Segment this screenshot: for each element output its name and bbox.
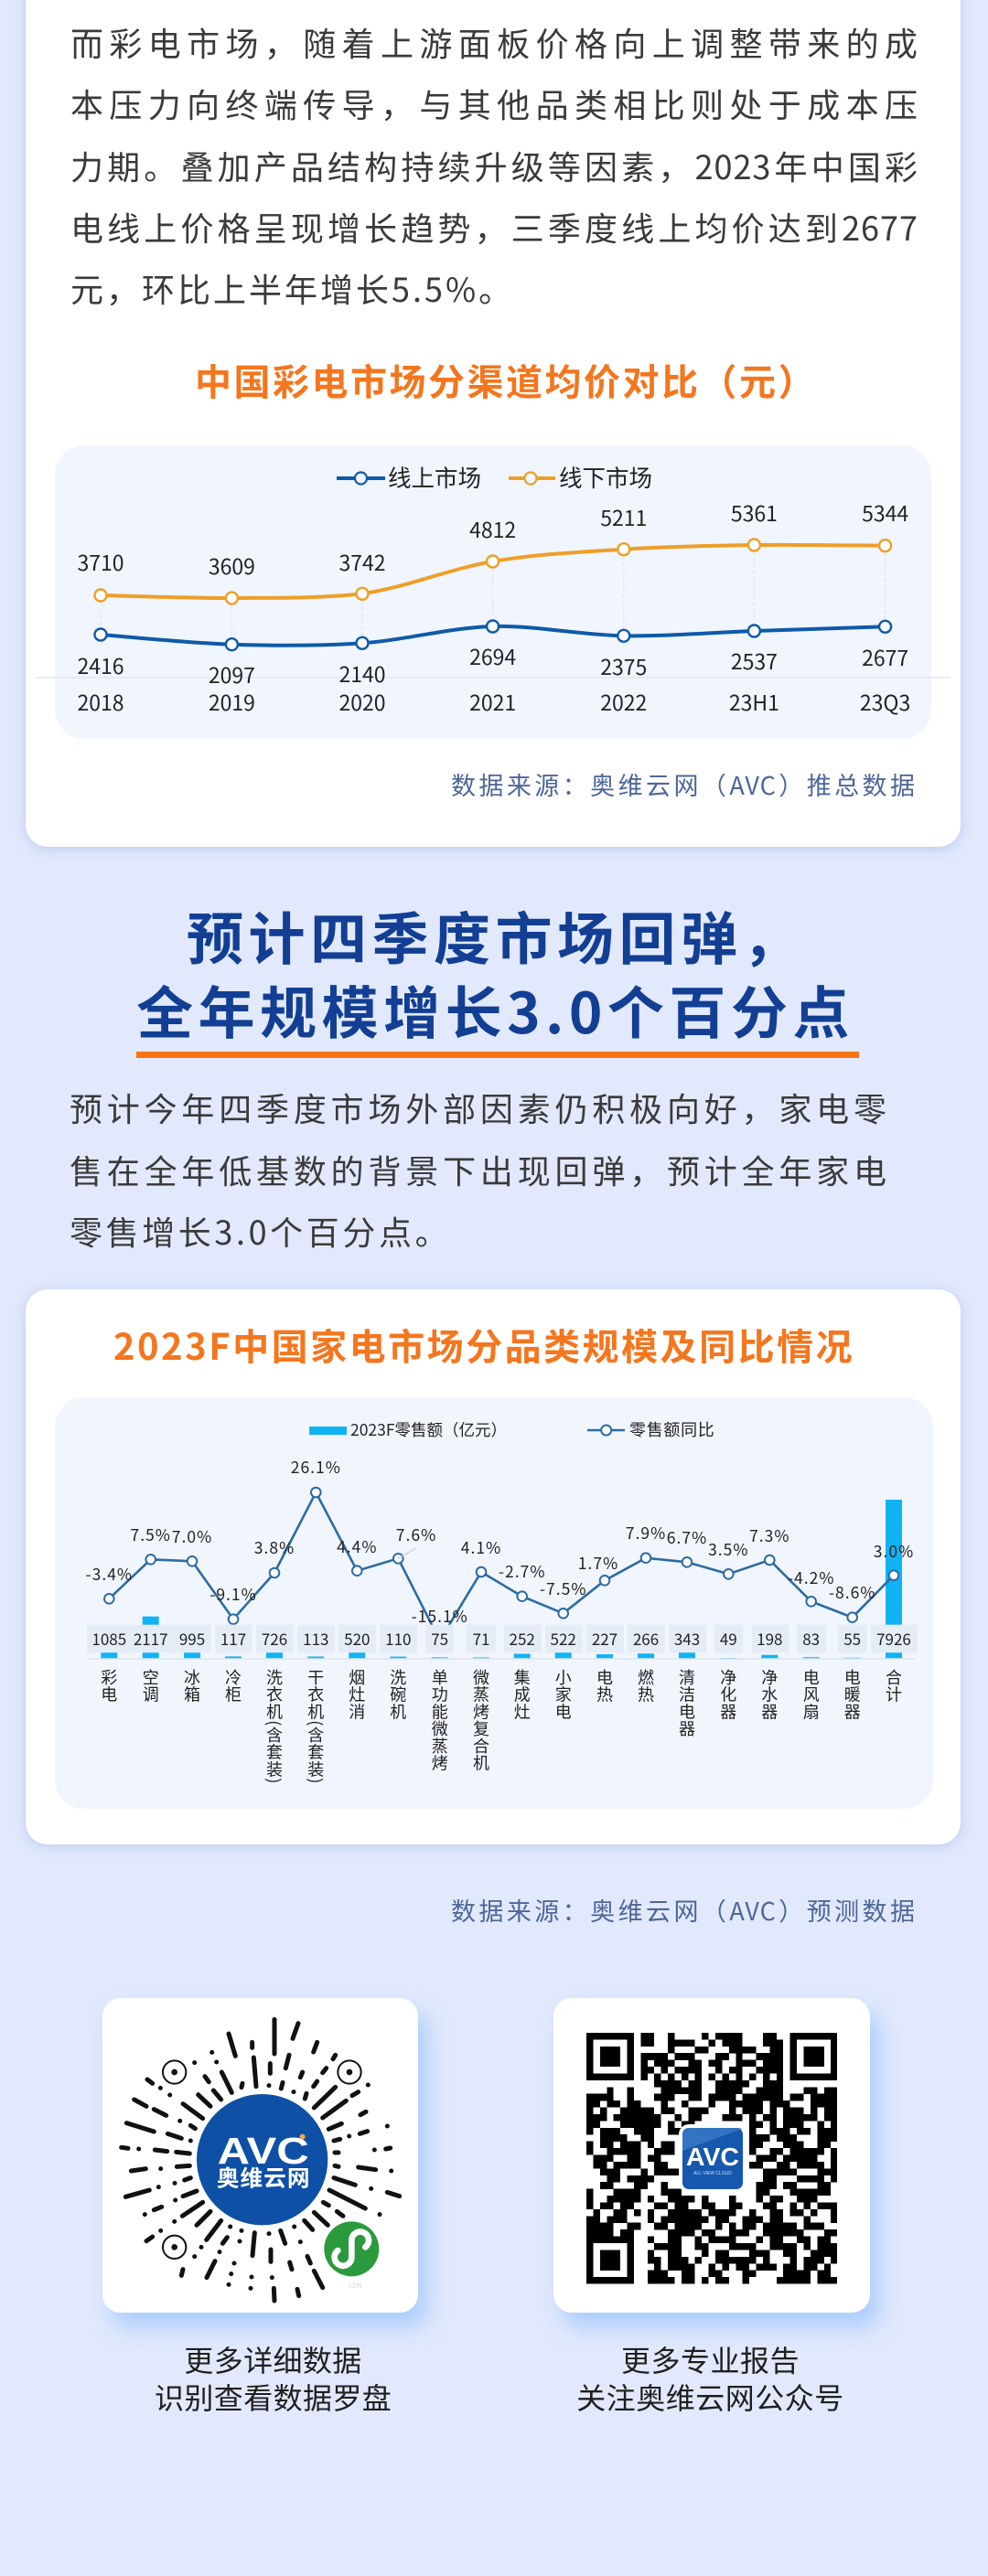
panel: category forecast card <box>26 1289 961 1844</box>
data labels and year axis: 2375 <box>600 650 647 681</box>
growth percentage labels: 6.7% <box>667 1526 707 1549</box>
category labels: 冷柜 <box>221 1669 245 1703</box>
retail value numbers: 71 <box>473 1627 489 1650</box>
text block: Q4 forecast paragraph: 预计今年四季度市场外部因素仍积极向好，家电零 <box>70 1084 887 1131</box>
icon: AVC circular logo <box>197 2094 328 2225</box>
category labels: 干衣机(含套装) <box>304 1669 328 1784</box>
retail value numbers: 522 <box>551 1627 576 1650</box>
category labels: 空调 <box>139 1669 163 1704</box>
icon: sunburst code pattern <box>122 2019 400 2301</box>
category labels: 清洁电器 <box>675 1669 699 1737</box>
growth percentage labels: -2.7% <box>499 1560 545 1583</box>
growth percentage labels: 26.1% <box>291 1456 341 1479</box>
data labels and year axis: 4812 <box>469 513 516 544</box>
icon: AVC square logo: AVC <box>686 2143 739 2171</box>
section heading: Q4 rebound: 预计四季度市场回弹， <box>187 893 804 976</box>
icon: mini program badge: LDN <box>349 2281 361 2291</box>
section heading: Q4 rebound <box>136 893 859 1058</box>
icon: AVC circular logo: 奥维云网 <box>217 2161 309 2194</box>
heading: channel average price chart: 中国彩电市场分渠道均价对比（元） <box>195 353 817 406</box>
growth percentage labels: 3.5% <box>708 1538 749 1561</box>
growth percentage labels <box>86 1456 914 1628</box>
category labels: 净化器 <box>716 1669 740 1720</box>
data labels and year axis: 2020 <box>338 686 386 717</box>
chart legend: 2023F零售额（亿元） <box>350 1418 507 1441</box>
data labels and year axis: 5344 <box>862 497 908 528</box>
icon: AVC square logo: ALL VIEW CLOUD <box>693 2171 732 2176</box>
category labels: 洗碗机 <box>386 1669 410 1720</box>
retail value label boxes <box>87 1625 918 1652</box>
caption: official account: 关注奥维云网公众号 <box>576 2376 844 2418</box>
retail value numbers: 117 <box>220 1627 246 1650</box>
category labels: 彩电 <box>97 1669 121 1703</box>
data labels and year axis: 2021 <box>469 686 516 717</box>
data labels and year axis: 23Q3 <box>860 686 910 717</box>
growth percentage labels: -4.2% <box>788 1566 834 1589</box>
retail value bars <box>101 1500 902 1659</box>
data labels and year axis: 2416 <box>77 649 124 680</box>
retail value numbers: 110 <box>385 1627 411 1650</box>
heading: category forecast chart: 2023F中国家电市场分品类规模及同比情况 <box>113 1318 854 1371</box>
data labels and year axis: 2677 <box>862 641 908 672</box>
growth percentage labels: 7.6% <box>396 1523 436 1546</box>
retail value numbers: 2117 <box>134 1627 168 1650</box>
category labels: 燃热 <box>634 1669 658 1703</box>
growth percentage labels: 1.7% <box>578 1552 618 1575</box>
text block: Q4 forecast paragraph: 零售增长3.0个百分点。 <box>70 1207 451 1255</box>
category labels: 电风扇 <box>800 1669 823 1720</box>
retail value numbers: 252 <box>510 1627 535 1650</box>
category labels: 小家电 <box>552 1669 575 1720</box>
text block: Q4 forecast paragraph: 售在全年低基数的背景下出现回弹，预计全年家电 <box>70 1146 887 1193</box>
panel: top white card <box>26 0 961 847</box>
data labels and year axis: 2694 <box>469 640 516 671</box>
growth percentage labels: -3.4% <box>86 1563 133 1586</box>
category labels: 单功能微蒸烤 <box>428 1669 452 1772</box>
text block: colour TV market paragraph: 元，环比上半年增长5.5%。 <box>70 264 514 312</box>
data labels and year axis: 3609 <box>209 550 255 581</box>
text block: Q4 forecast paragraph <box>70 1084 887 1255</box>
growth percentage labels: -9.1% <box>209 1583 257 1606</box>
retail value numbers: 995 <box>179 1627 205 1650</box>
icon: mini program badge <box>324 2221 379 2291</box>
retail value numbers: 198 <box>757 1627 782 1650</box>
icon: QR code modules <box>586 2036 837 2281</box>
growth percentage labels: -7.5% <box>540 1577 586 1600</box>
text block: colour TV market paragraph: 电线上价格呈现增长趋势，三季度线上均价达到2677 <box>70 203 918 251</box>
chart legend: 零售额同比 <box>629 1417 715 1441</box>
retail value numbers: 113 <box>303 1627 328 1650</box>
category labels: 电热 <box>593 1669 617 1703</box>
retail value numbers <box>91 1627 911 1650</box>
growth percentage labels: 7.3% <box>749 1524 790 1547</box>
growth percentage labels: 3.8% <box>254 1536 295 1559</box>
data labels and year axis: 5361 <box>731 497 778 528</box>
category labels: 电暖器 <box>841 1669 864 1720</box>
year-on-year growth line <box>104 1488 898 1641</box>
category labels: 集成灶 <box>510 1669 534 1720</box>
retail value numbers: 266 <box>633 1627 659 1650</box>
orange line: offline market <box>95 540 891 604</box>
panel: official account QR card <box>553 1998 870 2313</box>
caption: mini program: 识别查看数据罗盘 <box>155 2376 392 2418</box>
category labels <box>97 1669 906 1784</box>
growth percentage labels: 4.1% <box>461 1536 501 1559</box>
growth percentage labels: -8.6% <box>829 1581 875 1604</box>
text block: colour TV market paragraph: 而彩电市场，随着上游面板价格向上调整带来的成 <box>70 18 918 66</box>
data labels and year axis: 2097 <box>209 658 255 689</box>
growth percentage labels: -15.1% <box>412 1605 468 1628</box>
section heading: Q4 rebound: 全年规模增长3.0个百分点 <box>136 967 854 1050</box>
data labels and year axis <box>77 497 910 717</box>
category labels: 合计 <box>882 1669 906 1703</box>
data labels and year axis: 23H1 <box>729 686 779 717</box>
category labels: 冰箱 <box>180 1669 204 1703</box>
retail value numbers: 55 <box>843 1627 861 1650</box>
retail value numbers: 7926 <box>876 1627 911 1650</box>
data labels and year axis: 2019 <box>209 686 255 717</box>
category labels: 洗衣机(含套装) <box>263 1669 286 1784</box>
blue line: online market <box>95 620 891 650</box>
text block: colour TV market paragraph <box>70 18 918 312</box>
retail value numbers: 1085 <box>91 1627 126 1650</box>
retail value numbers: 227 <box>592 1627 618 1650</box>
source note: forecast data: 数据来源：奥维云网（AVC）预测数据 <box>451 1892 916 1928</box>
chart legend: 线上市场 <box>388 460 481 494</box>
growth percentage labels: 3.0% <box>874 1540 914 1563</box>
caption: mini program <box>155 2338 392 2418</box>
text block: colour TV market paragraph: 力期。叠加产品结构持续升级等因素，2023年中国彩 <box>70 142 918 189</box>
caption: official account <box>576 2338 844 2418</box>
retail value numbers: 49 <box>720 1627 737 1650</box>
chart legend: 线下市场 <box>559 460 652 494</box>
panel: channel average price line chart <box>55 445 931 739</box>
caption: official account: 更多专业报告 <box>621 2338 800 2380</box>
retail value numbers: 343 <box>674 1627 700 1650</box>
growth percentage labels: 7.0% <box>172 1525 212 1548</box>
chart legend <box>337 460 652 494</box>
panel: category retail and growth chart <box>55 1397 933 1809</box>
source note: online estimates: 数据来源：奥维云网（AVC）推总数据 <box>451 766 916 802</box>
growth percentage labels: 4.4% <box>337 1535 378 1558</box>
icon: AVC circular logo: AVC <box>218 2130 309 2172</box>
retail value numbers: 75 <box>431 1627 448 1650</box>
retail value numbers: 520 <box>344 1627 370 1650</box>
retail value numbers: 726 <box>262 1627 287 1650</box>
data labels and year axis: 2537 <box>731 645 778 676</box>
data labels and year axis: 3710 <box>77 546 124 577</box>
growth percentage labels: 7.9% <box>626 1522 666 1545</box>
data labels and year axis: 5211 <box>600 501 647 532</box>
category labels: 微蒸烤复合机 <box>469 1669 493 1772</box>
retail value numbers: 83 <box>802 1627 820 1650</box>
chart legend <box>309 1417 715 1441</box>
text block: colour TV market paragraph: 本压力向终端传导，与其他品类相比则处于成本压 <box>70 80 918 127</box>
panel: mini program code card <box>102 1998 418 2313</box>
growth percentage labels: 7.5% <box>130 1523 171 1546</box>
data labels and year axis: 2018 <box>77 686 124 717</box>
caption: mini program: 更多详细数据 <box>184 2338 362 2380</box>
data labels and year axis: 2140 <box>338 657 386 689</box>
icon: AVC square logo <box>681 2126 745 2191</box>
data labels and year axis: 2022 <box>600 686 647 717</box>
category labels: 净水器 <box>757 1669 781 1720</box>
data labels and year axis: 3742 <box>338 546 386 577</box>
category labels: 烟灶消 <box>345 1669 369 1720</box>
